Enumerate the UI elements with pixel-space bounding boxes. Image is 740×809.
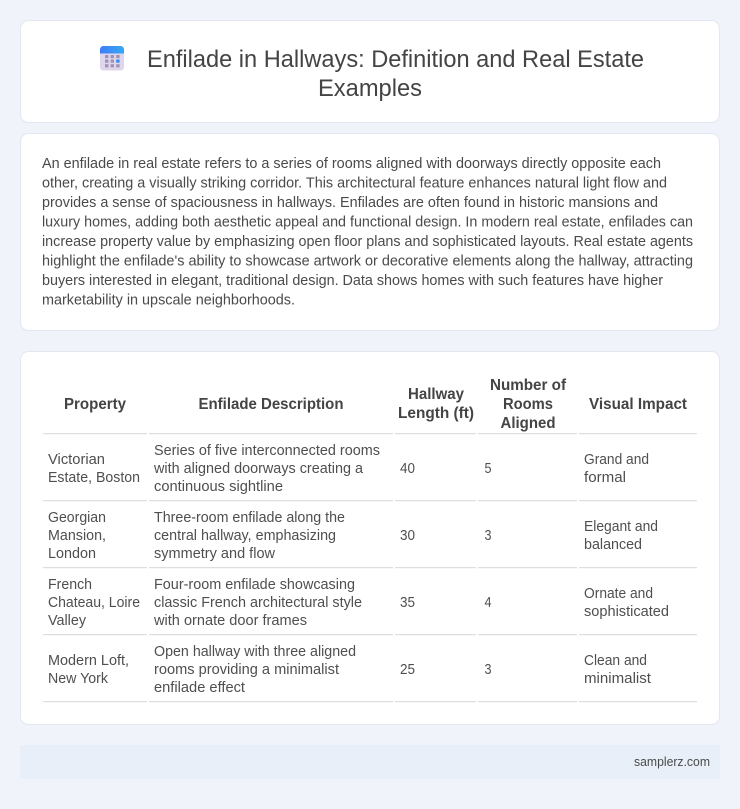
text block: enfilade description: highlight the enfilade's ability to showcase artwork or decorative elements along the hallway, attracting	[42, 254, 693, 270]
table row: Modern Loft: Modern Loft,	[48, 653, 129, 669]
text block: enfilade description	[42, 156, 693, 308]
table row: Modern Loft: Open hallway with three aligned	[154, 644, 356, 660]
table row: Victorian Estate: Victorian	[48, 452, 105, 468]
table header row	[64, 377, 688, 432]
table row: Georgian Mansion: central hallway, emphasizing	[154, 528, 336, 544]
table header row: Hallway	[408, 386, 464, 403]
table row: Georgian Mansion: 3	[484, 528, 492, 544]
panel: intro text	[20, 134, 720, 330]
table row: Victorian Estate: with aligned doorways creating a	[153, 461, 363, 477]
table header row: Enfilade Description	[198, 396, 344, 413]
table row: French Chateau: with ornate door frames	[153, 613, 307, 629]
table row: Victorian Estate: 40	[400, 461, 415, 477]
table row: Modern Loft: enfilade effect	[154, 680, 245, 696]
table row: French Chateau: classic French architectural style	[154, 595, 362, 611]
table header row: Visual Impact	[589, 396, 688, 413]
table row: Georgian Mansion: London	[48, 546, 96, 562]
table row: French Chateau: 4	[484, 595, 492, 611]
table row: Georgian Mansion: 30	[400, 528, 415, 544]
table row: Georgian Mansion: balanced	[584, 537, 642, 553]
title: Examples	[318, 75, 422, 102]
table row: Modern Loft: rooms providing a minimalist	[154, 662, 339, 678]
footer	[20, 745, 720, 779]
table row: Victorian Estate: 5	[484, 461, 492, 477]
text block: enfilade description: buyers interested in elegant, traditional design. Data shows homes with such features have higher	[42, 273, 663, 289]
table row: Georgian Mansion: Elegant and	[584, 519, 658, 535]
table row: Victorian Estate: Grand and	[584, 452, 649, 468]
table row: Georgian Mansion: Mansion,	[48, 528, 106, 544]
text block: enfilade description: other, creating a visually striking corridor. This architectural feature enhances natural light flow and	[42, 176, 667, 192]
table row: Modern Loft	[48, 644, 651, 696]
title	[147, 46, 644, 102]
text block: enfilade description: luxury homes, adding both aesthetic appeal and functional design. In modern real estate, enfilades can	[42, 214, 693, 230]
table row: Modern Loft: Clean and	[584, 653, 647, 669]
table header row: Length (ft)	[398, 405, 474, 422]
table header row: Rooms	[503, 396, 553, 413]
table row: Georgian Mansion: symmetry and flow	[154, 546, 276, 562]
table header row: Aligned	[500, 415, 556, 432]
panel: title header	[20, 20, 720, 122]
table row: Modern Loft: New York	[48, 671, 109, 687]
table row: Victorian Estate: continuous sightline	[154, 479, 283, 495]
table row: French Chateau: 35	[400, 595, 415, 611]
icon: calendar	[100, 46, 124, 70]
text block: enfilade description: An enfilade in real estate refers to a series of rooms aligned with doorways directly opposite each	[42, 156, 661, 172]
title: Enfilade in Hallways: Definition and Real Estate	[147, 46, 644, 73]
table row: Georgian Mansion: Georgian	[48, 510, 106, 526]
table row: Modern Loft: 25	[400, 662, 415, 678]
table row: French Chateau: Valley	[48, 613, 87, 629]
table row: Victorian Estate: formal	[584, 470, 626, 486]
table row: Victorian Estate	[48, 443, 649, 495]
table row: French Chateau: Four-room enfilade showcasing	[154, 577, 355, 593]
table row: French Chateau: Ornate and	[584, 586, 653, 602]
table row: French Chateau: Chateau, Loire	[48, 595, 140, 611]
table row: Victorian Estate: Estate, Boston	[48, 470, 140, 486]
table row: Victorian Estate: Series of five interconnected rooms	[154, 443, 380, 459]
table row: Georgian Mansion: Three-room enfilade along the	[154, 510, 345, 526]
table row: French Chateau: sophisticated	[584, 604, 669, 620]
text block: enfilade description: increase property value by emphasizing open floor plans and sophisticated layouts. Real estate agents	[42, 234, 693, 250]
text block: enfilade description: marketability in upscale neighborhoods.	[42, 292, 295, 308]
table row: Georgian Mansion	[48, 510, 658, 562]
table header row: Property	[64, 396, 126, 413]
panel: property table	[20, 352, 720, 724]
table header row: Number of	[490, 377, 567, 394]
table row: Modern Loft: 3	[484, 662, 492, 678]
footer: samplerz.com	[634, 755, 710, 769]
table row: Modern Loft: minimalist	[584, 671, 651, 687]
text block: enfilade description: provides a sense of spaciousness in hallways. Enfilades are often found in historic mansions and	[42, 195, 658, 211]
table row: French Chateau: French	[48, 577, 92, 593]
table row: French Chateau	[48, 577, 669, 629]
